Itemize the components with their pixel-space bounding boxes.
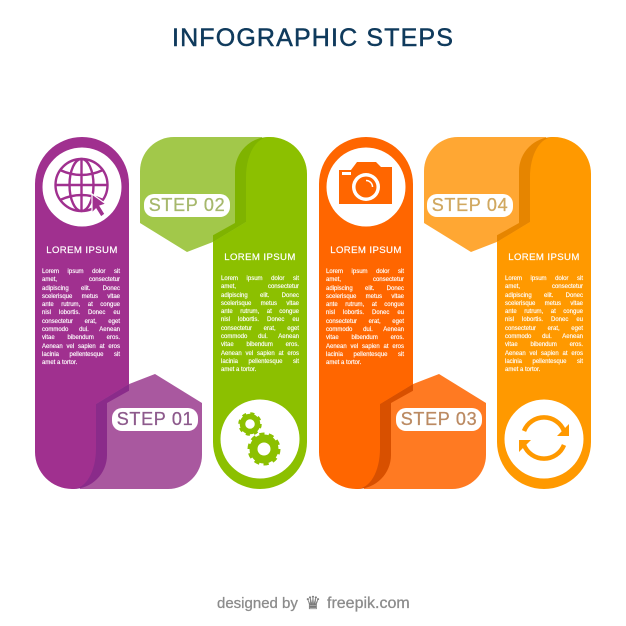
text block: step 4: adipiscing elit. Donec [505, 293, 583, 299]
text block: step 4: lacinia pellentesque sit [505, 359, 583, 365]
text block: step 3: commodo dui. Aenean [326, 327, 404, 333]
text block: step 1: scelerisque metus vitae [42, 294, 120, 300]
heading: step 3: LOREM IPSUM [330, 245, 402, 256]
text block: step 2: vitae bibendum eros. [221, 342, 299, 348]
text block: step 4: commodo dui. Aenean [505, 334, 583, 340]
text block: step 1: Aenean vel sapien at eros [42, 344, 120, 350]
text block: step 2: adipiscing elit. Donec [221, 293, 299, 299]
footer credit: freepik.com [327, 595, 410, 612]
text block: step 3: vitae bibendum eros. [326, 335, 404, 341]
text block: step 2: nisl lobortis. Donec eu [221, 317, 299, 323]
panel: step 04 amber ribbon [424, 137, 591, 489]
text block: step 4: amet, consectetur [505, 284, 583, 290]
text block: step 2: Lorem ipsum dolor sit [221, 276, 299, 282]
text block: step 4 [504, 275, 584, 373]
text block: step 1: commodo dui. Aenean [42, 327, 120, 333]
text block: step 3: consectetur erat, eget [326, 319, 404, 325]
text block: step 2: amet a tortor. [221, 367, 256, 373]
text block: step 1: lacinia pellentesque sit [42, 352, 120, 358]
text block: step 4: amet a tortor. [505, 367, 540, 373]
text block: step 1: amet, consectetur [42, 277, 120, 283]
text block: step 2: amet, consectetur [221, 284, 299, 290]
heading: step 1: LOREM IPSUM [46, 245, 118, 256]
text block: step 3: ante rutrum, at congue [326, 302, 404, 308]
panel: step 02 green ribbon [140, 137, 307, 489]
text block: step 1: amet a tortor. [42, 360, 77, 366]
heading: step 4: LOREM IPSUM [508, 252, 580, 263]
text block: step 4: ante rutrum, at congue [505, 309, 583, 315]
text block: step 3: nisl lobortis. Donec eu [326, 310, 404, 316]
label: step 01: STEP 01 [117, 409, 193, 429]
text block: step 3: adipiscing elit. Donec [326, 286, 404, 292]
text block: step 3: amet a tortor. [326, 360, 361, 366]
label: step 03: STEP 03 [401, 409, 477, 429]
title: INFOGRAPHIC STEPS [172, 24, 454, 52]
text block: step 2: ante rutrum, at congue [221, 309, 299, 315]
footer credit: ♛ [305, 593, 321, 613]
icon: globe with cursor [42, 148, 122, 226]
text block: step 4: Lorem ipsum dolor sit [505, 276, 583, 282]
panel: step 01 purple ribbon [35, 137, 202, 489]
text block: step 3 [326, 268, 404, 366]
text block: step 4: consectetur erat, eget [505, 326, 583, 332]
text block: step 2 [220, 275, 300, 373]
label: step 02: STEP 02 [149, 195, 225, 215]
text block: step 3: scelerisque metus vitae [326, 294, 404, 300]
text block: step 1: ante rutrum, at congue [42, 302, 120, 308]
text block: step 3: Aenean vel sapien at eros [326, 344, 404, 350]
footer credit [217, 593, 410, 613]
heading: step 2: LOREM IPSUM [224, 252, 296, 263]
text block: step 2: Aenean vel sapien at eros [221, 351, 299, 357]
icon: sync arrows [504, 400, 584, 478]
panel: step 03 orange ribbon [319, 137, 486, 489]
text block: step 2: consectetur erat, eget [221, 326, 299, 332]
text block: step 2: scelerisque metus vitae [221, 301, 299, 307]
text block: step 1: adipiscing elit. Donec [42, 286, 120, 292]
text block: step 1: consectetur erat, eget [42, 319, 120, 325]
text block: step 1: nisl lobortis. Donec eu [42, 310, 120, 316]
text block: step 4: nisl lobortis. Donec eu [505, 317, 583, 323]
text block: step 1: vitae bibendum eros. [42, 335, 120, 341]
text block: step 3: amet, consectetur [326, 277, 404, 283]
text block: step 4: scelerisque metus vitae [505, 301, 583, 307]
text block: step 4: vitae bibendum eros. [505, 342, 583, 348]
footer credit: designed by [217, 595, 298, 612]
text block: step 1: Lorem ipsum dolor sit [42, 269, 120, 275]
icon: camera [326, 148, 406, 226]
text block: step 2: commodo dui. Aenean [221, 334, 299, 340]
text block: step 2: lacinia pellentesque sit [221, 359, 299, 365]
text block: step 4: Aenean vel sapien at eros [505, 351, 583, 357]
text block: step 1 [42, 268, 120, 366]
text block: step 3: lacinia pellentesque sit [326, 352, 404, 358]
text block: step 3: Lorem ipsum dolor sit [326, 269, 404, 275]
icon: gears [220, 400, 300, 478]
label: step 04: STEP 04 [432, 195, 508, 215]
